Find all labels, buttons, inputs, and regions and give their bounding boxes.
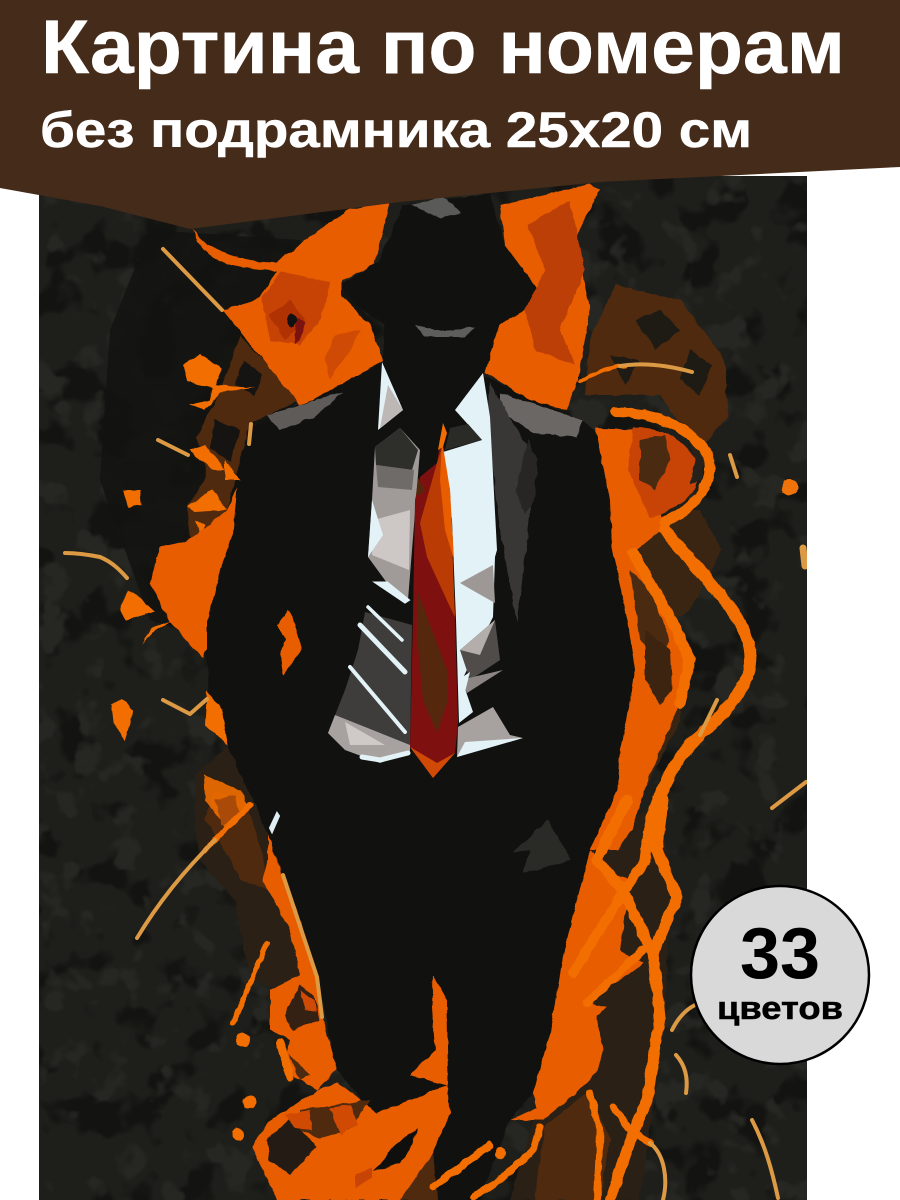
painting: shirt and jacket highlights — [328, 362, 523, 778]
badge: 33 colours: 33 — [740, 914, 820, 994]
badge: 33 colours — [691, 886, 869, 1064]
right shirt panel — [443, 373, 497, 723]
painting: white drop — [270, 813, 279, 832]
painting: tan paint lines — [65, 249, 806, 1200]
tie — [410, 423, 458, 778]
panel: painting — [39, 176, 807, 1200]
orange drip strokes — [205, 366, 750, 1200]
left collar — [378, 362, 403, 430]
painting: orange paint shapes — [111, 184, 798, 1200]
lower right shirt folds — [460, 565, 495, 603]
lower left shirt folds — [328, 612, 412, 745]
title: Картина по номерам — [41, 5, 845, 90]
left shirt shading — [368, 428, 420, 600]
banner — [0, 0, 900, 229]
painting: man silhouette — [207, 194, 635, 1200]
painting background — [39, 176, 807, 1200]
subtitle: без подрамника 25х20 см — [40, 102, 752, 158]
badge: 33 colours: цветов — [717, 990, 843, 1026]
painting: brown shadow patches — [187, 285, 728, 1200]
